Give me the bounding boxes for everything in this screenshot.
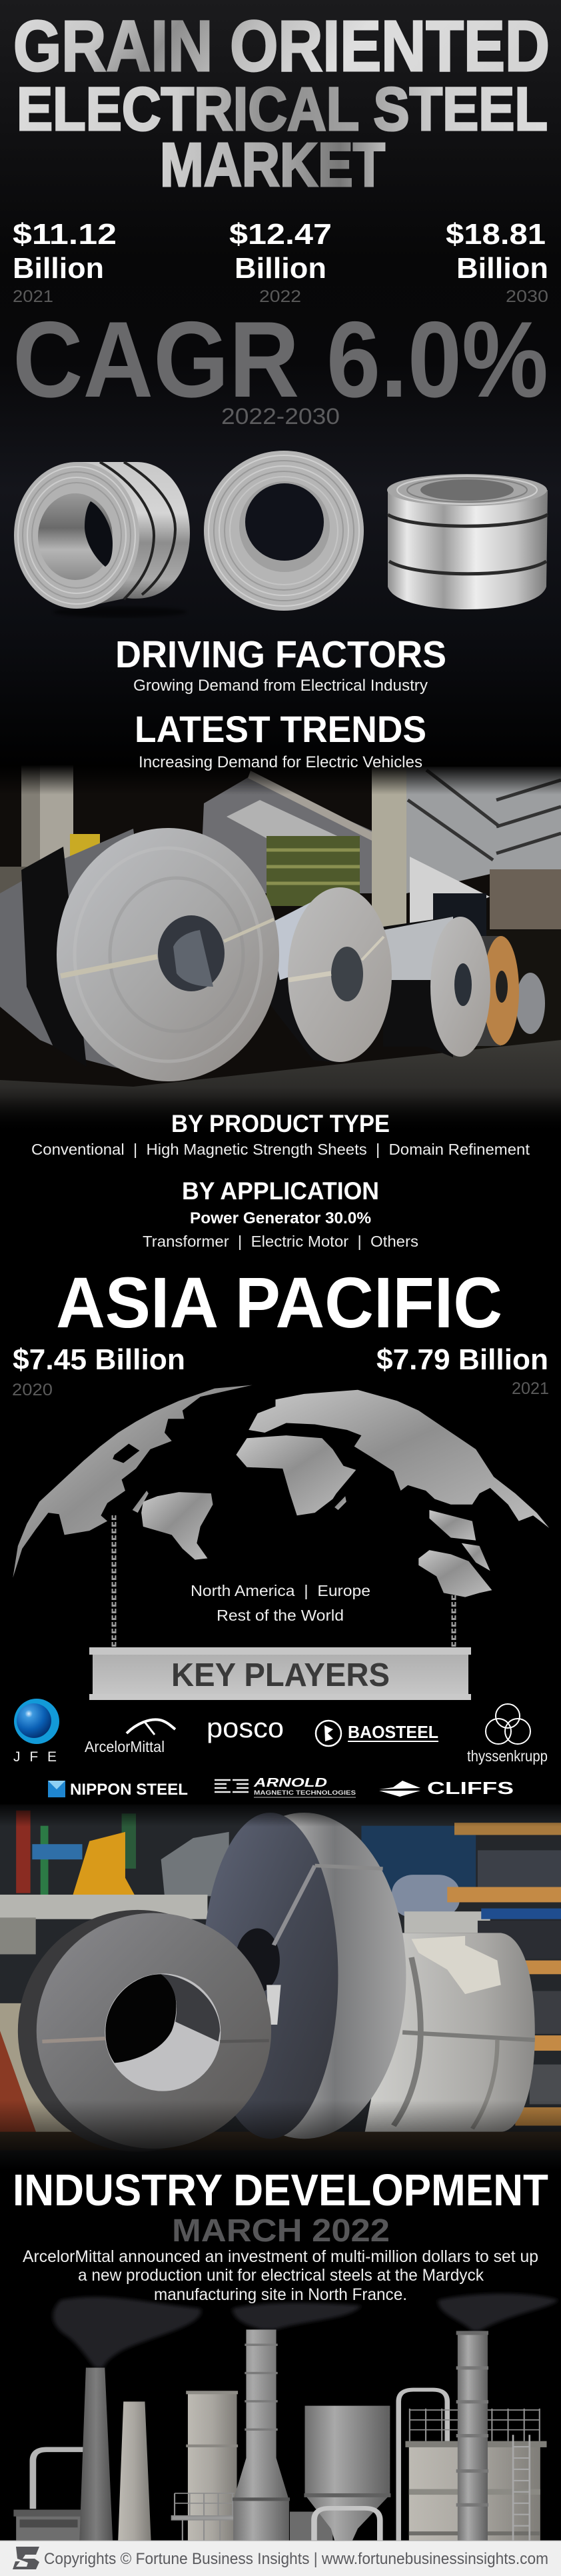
tall coil bbox=[202, 1813, 406, 2139]
heading: Asia Pacific: ASIA PACIFIC bbox=[56, 1262, 502, 1343]
heading: industry development bbox=[13, 2165, 548, 2249]
logo: Baosteel: BAOSTEEL bbox=[348, 1722, 438, 1742]
pipe: hopper bbox=[314, 2508, 380, 2541]
key players sign bbox=[89, 1647, 471, 1700]
smoke bbox=[53, 2293, 558, 2368]
stat: 2021 market size: $11.12 bbox=[13, 218, 117, 251]
factory illustration bbox=[13, 2293, 558, 2541]
key players sign: KEY PLAYERS bbox=[171, 1657, 390, 1693]
front coil bbox=[18, 1910, 271, 2152]
pipe: left bbox=[33, 2449, 83, 2509]
heading: latest trends: Increasing Demand for Electric Vehicles bbox=[139, 753, 422, 771]
logo: thyssenkrupp: thyssenkrupp bbox=[467, 1747, 548, 1765]
right tank bbox=[405, 2441, 547, 2541]
large coil bbox=[0, 828, 279, 1081]
logo: JFE bbox=[13, 1699, 59, 1765]
logo: Fortune Business Insights bbox=[13, 2547, 39, 2569]
stat: 2030 market size: 2030 bbox=[506, 287, 548, 306]
heading: driving factors: Growing Demand from Electrical Industry bbox=[133, 677, 428, 695]
logo: Arnold: MAGNETIC TECHNOLOGIES bbox=[254, 1789, 356, 1796]
text: development description: ArcelorMittal announced an investment of multi-million dollars to set up bbox=[23, 2247, 538, 2266]
logo: ArcelorMittal: ArcelorMittal bbox=[85, 1738, 165, 1755]
heading: industry development: MARCH 2022 bbox=[172, 2213, 390, 2249]
stat: 2022 market size: 2022 bbox=[259, 287, 301, 306]
icon: steel coil side view bbox=[14, 462, 190, 617]
logo: Cliffs: CLIFFS bbox=[427, 1778, 514, 1798]
segment: by application: Transformer | Electric Motor | Others bbox=[143, 1233, 418, 1250]
panel: warehouse photo with coils bbox=[0, 765, 561, 1133]
roof and walls bbox=[0, 767, 561, 936]
icon: steel coil front view bbox=[204, 451, 364, 611]
footer bbox=[0, 2541, 561, 2576]
segment: by product type bbox=[31, 1110, 530, 1158]
stat: 2020 regional value bbox=[12, 1343, 185, 1399]
title: MARKET bbox=[160, 130, 385, 199]
text: other regions: Rest of the World bbox=[217, 1607, 344, 1624]
text: other regions: North America | Europe bbox=[191, 1582, 370, 1599]
chains bbox=[114, 1515, 454, 1648]
stat: 2022 market size: $12.47 bbox=[229, 218, 332, 251]
logo: JFE: JFE bbox=[13, 1749, 57, 1765]
logo: posco: posco bbox=[207, 1712, 284, 1743]
logo: Cliffs bbox=[379, 1778, 514, 1798]
stack: right bbox=[456, 2331, 488, 2541]
stack: centre bbox=[233, 2329, 290, 2541]
segment: by product type: Conventional | High Magnetic Strength Sheets | Domain Refinement bbox=[31, 1141, 530, 1158]
segment: by application: Power Generator 30.0% bbox=[190, 1209, 371, 1227]
text: other regions bbox=[191, 1582, 370, 1624]
segment: by application: BY APPLICATION bbox=[182, 1177, 379, 1205]
stat: 2021 market size: Billion bbox=[13, 252, 104, 285]
logos: key players bbox=[13, 1699, 548, 1799]
title bbox=[13, 5, 550, 199]
stat: 2030 market size: Billion bbox=[456, 252, 548, 285]
stat: 2030 market size bbox=[446, 218, 548, 306]
heading: driving factors bbox=[115, 633, 446, 695]
heading: latest trends: LATEST TRENDS bbox=[135, 708, 426, 750]
logo: Baosteel bbox=[316, 1721, 438, 1746]
chimney: tall bbox=[79, 2368, 113, 2541]
stat: 2020 regional value: 2020 bbox=[12, 1381, 53, 1399]
hopper bbox=[304, 2406, 390, 2541]
segment: by application bbox=[143, 1177, 418, 1250]
logo: Nippon Steel: NIPPON STEEL bbox=[70, 1781, 188, 1799]
heading: driving factors: DRIVING FACTORS bbox=[115, 633, 446, 676]
logo: thyssenkrupp bbox=[467, 1704, 548, 1765]
stat: 2022 market size: Billion bbox=[235, 252, 326, 285]
logo: Arnold: ARNOLD bbox=[253, 1776, 327, 1789]
left building bbox=[13, 2510, 332, 2541]
stat: 2020 regional value: $7.45 Billion bbox=[13, 1343, 185, 1376]
stat: 2021 regional value: 2021 bbox=[512, 1379, 549, 1398]
CAGR headline: 2022-2030 bbox=[221, 404, 340, 429]
icon: steel coil upright bbox=[387, 474, 548, 609]
logo: ArcelorMittal bbox=[85, 1719, 175, 1755]
stat: 2022 market size bbox=[229, 218, 332, 306]
stat: 2021 market size bbox=[13, 218, 117, 306]
text: development description: a new production unit for electrical steels at the Mardyck bbox=[78, 2266, 484, 2285]
floor bbox=[0, 1040, 561, 1108]
segment: by product type: BY PRODUCT TYPE bbox=[171, 1110, 390, 1137]
right coil bbox=[365, 1933, 535, 2132]
stat: 2021 market size: 2021 bbox=[13, 287, 53, 306]
ladder bbox=[513, 2435, 530, 2541]
back coils bbox=[267, 887, 545, 1063]
tank: pale bbox=[186, 2391, 238, 2541]
panel: steel coils photo bbox=[0, 1800, 561, 2171]
text: development description: manufacturing site in North France. bbox=[154, 2285, 407, 2304]
logo: Arnold bbox=[215, 1776, 356, 1797]
stat: 2021 regional value bbox=[376, 1343, 549, 1398]
railing and arch pipe bbox=[398, 2390, 540, 2541]
platform railing bbox=[172, 2493, 235, 2541]
text: development description bbox=[23, 2247, 538, 2304]
world map dome bbox=[13, 1385, 549, 1597]
chimney: pale bbox=[118, 2401, 151, 2541]
stat: 2030 market size: $18.81 bbox=[446, 218, 546, 251]
heading: latest trends bbox=[135, 708, 426, 771]
stat: 2021 regional value: $7.79 Billion bbox=[376, 1343, 548, 1376]
